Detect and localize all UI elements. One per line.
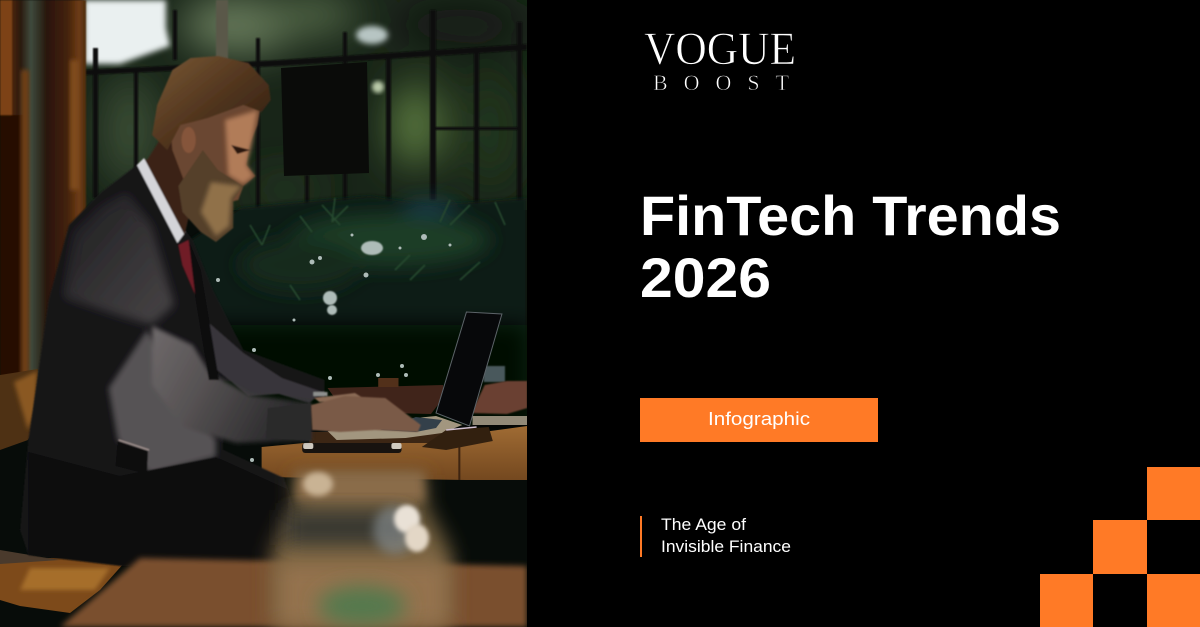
photo: blurred foreground table: [60, 558, 527, 627]
subtitle: The Age of Invisible Finance: Invisible Finance: [661, 538, 791, 556]
lit shoulder and back: [63, 192, 174, 325]
photo: green hedge: [190, 196, 527, 462]
title: FinTech Trends 2026: [640, 184, 1061, 309]
decorative orange checker squares: [1040, 467, 1200, 627]
shirt collar: [137, 158, 186, 243]
laptop base: [328, 416, 462, 440]
far hand: [314, 393, 363, 402]
neck: [144, 142, 189, 235]
photo: blurred glass jar: [272, 472, 450, 627]
jacket pocket panel: [108, 330, 216, 474]
subtitle: The Age of Invisible Finance: The Age of: [661, 516, 746, 534]
title: FinTech Trends 2026: FinTech Trends: [640, 184, 1061, 247]
phone: [302, 443, 402, 453]
lit sleeve: [152, 326, 311, 443]
photo: bright sky: [84, 0, 170, 64]
photo: wooden table and laptop setup: [262, 312, 534, 480]
sunglasses: [422, 427, 493, 450]
face: [171, 104, 260, 202]
title: FinTech Trends 2026: 2026: [640, 246, 771, 309]
lapel shadow: [189, 240, 219, 380]
photo: dark hanging sign: [281, 62, 369, 176]
photo: bearded man in suit working on a laptop: [0, 0, 534, 627]
photo: metal fence: [85, 0, 527, 210]
logo: Vogue Boost: VOGUE: [644, 23, 796, 75]
logo: Vogue Boost: BOOST: [653, 70, 790, 95]
cuff: [266, 403, 311, 441]
badge: Infographic: Infographic: [708, 409, 810, 429]
badge: Infographic: [640, 398, 878, 442]
far sleeve: [208, 322, 322, 403]
briefcase: [328, 385, 443, 414]
suit body: [20, 165, 324, 566]
dark trousers: [28, 452, 289, 566]
watch: [313, 392, 328, 396]
subtitle: The Age of Invisible Finance: [640, 516, 791, 557]
photo: wooden bench: [0, 369, 125, 613]
necktie: [178, 240, 197, 298]
ear: [182, 127, 196, 153]
logo: Vogue Boost: [644, 23, 796, 95]
hand on keyboard: [311, 396, 421, 432]
photo backdrop: green bokeh garden: [0, 0, 530, 627]
glass and right hand: [484, 366, 505, 382]
laptop screen: [436, 312, 502, 426]
photo: wooden post: [0, 0, 86, 380]
hair: [152, 56, 271, 150]
photo: man in dark suit: [20, 56, 421, 566]
beard: [178, 150, 243, 242]
